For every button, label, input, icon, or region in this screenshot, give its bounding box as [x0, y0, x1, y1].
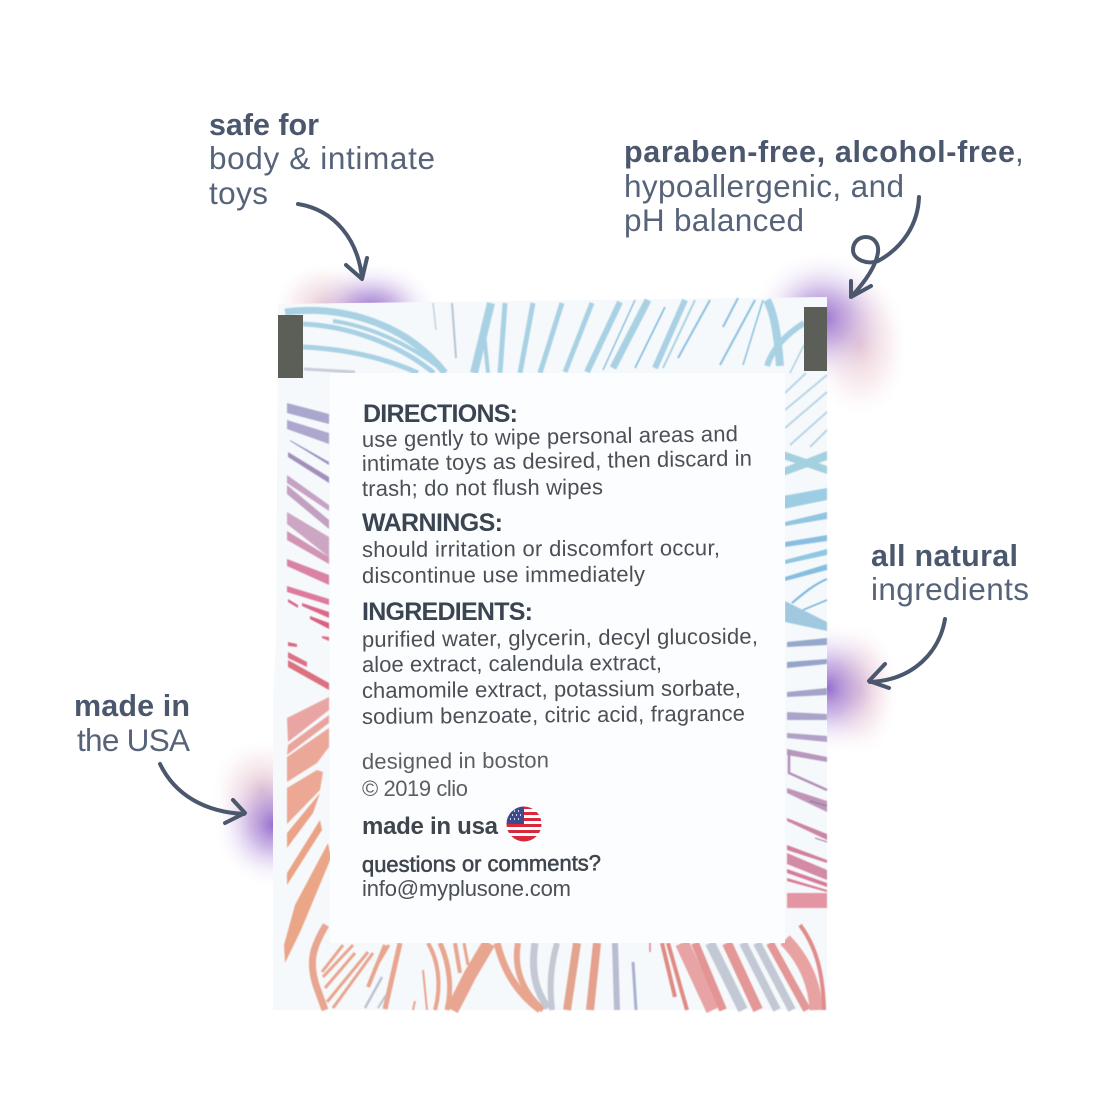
- icon: american flag: [506, 806, 542, 842]
- callout: paraben-free: pH balanced: [624, 202, 804, 238]
- text block: ingredients: purified water, glycerin, decyl glucoside,: [362, 624, 758, 652]
- text block: directions: [362, 400, 752, 501]
- text block: warnings: should irritation or discomfort occur,: [362, 535, 720, 562]
- text block: directions: DIRECTIONS:: [363, 400, 518, 428]
- right pattern: blue to pink stripes: [783, 373, 827, 908]
- callout: paraben-free: hypoallergenic, and: [624, 168, 904, 204]
- arrow: to top left of packet: [298, 204, 367, 279]
- text block: directions: intimate toys as desired, then discard in: [362, 446, 752, 476]
- text block: warnings: WARNINGS:: [362, 509, 503, 537]
- sealing tab right: [804, 307, 827, 371]
- text block: directions: use gently to wipe personal areas and: [362, 421, 738, 452]
- bottom pattern: coral and grey strokes: [312, 925, 824, 1010]
- text block: ingredients: chamomile extract, potassium sorbate,: [362, 675, 741, 703]
- callout: made in the USA: [74, 689, 190, 758]
- text block: contact: questions or comments?: [362, 850, 601, 877]
- left pattern: purple to red stripes: [284, 403, 331, 963]
- text block: ingredients: aloe extract, calendula extract,: [362, 650, 662, 677]
- callout: made in the USA: the USA: [77, 722, 190, 758]
- callout: safe for body and intimate toys: body & intimate: [209, 140, 435, 176]
- callout: safe for body and intimate toys: safe for: [209, 108, 319, 142]
- callout: safe for body and intimate toys: toys: [209, 175, 268, 211]
- callout: safe for body and intimate toys: [209, 108, 435, 211]
- arrow: looped to top right of packet: [851, 197, 919, 297]
- callout: all natural ingredients: [871, 539, 1029, 607]
- text block: ingredients: [362, 598, 758, 729]
- packet background: [273, 297, 827, 1010]
- text block: origin and copyright: [362, 747, 549, 801]
- text block: warnings: [362, 509, 720, 588]
- callout: paraben-free: paraben-free, alcohol-free: [624, 135, 1015, 169]
- text block: origin and copyright: designed in boston: [362, 747, 549, 774]
- text block: warnings: discontinue use immediately: [362, 562, 645, 588]
- glow: behind card highlights: [212, 252, 908, 887]
- callout: paraben-free: [624, 133, 1024, 238]
- callout: all natural ingredients: ingredients: [871, 571, 1029, 607]
- arrow: to right of packet: [869, 619, 945, 688]
- text block: origin and copyright: © 2019 clio: [362, 776, 468, 801]
- panel: wipe packet: [273, 297, 827, 1010]
- text block: directions: trash; do not flush wipes: [362, 474, 603, 501]
- callout: paraben-free: ,: [1015, 133, 1024, 169]
- white label panel: [330, 373, 785, 943]
- callout: all natural ingredients: all natural: [871, 539, 1018, 573]
- callout: made in the USA: made in: [74, 689, 190, 723]
- top pattern: blue strokes: [285, 298, 804, 373]
- sealing tab left: [278, 315, 303, 378]
- text: made in usa: made in usa: [362, 813, 499, 840]
- text block: contact: info@myplusone.com: [362, 876, 571, 901]
- text block: contact: [362, 850, 601, 901]
- text block: ingredients: INGREDIENTS:: [362, 598, 533, 626]
- arrow: to left of packet: [160, 764, 245, 823]
- text block: ingredients: sodium benzoate, citric acid, fragrance: [362, 701, 745, 729]
